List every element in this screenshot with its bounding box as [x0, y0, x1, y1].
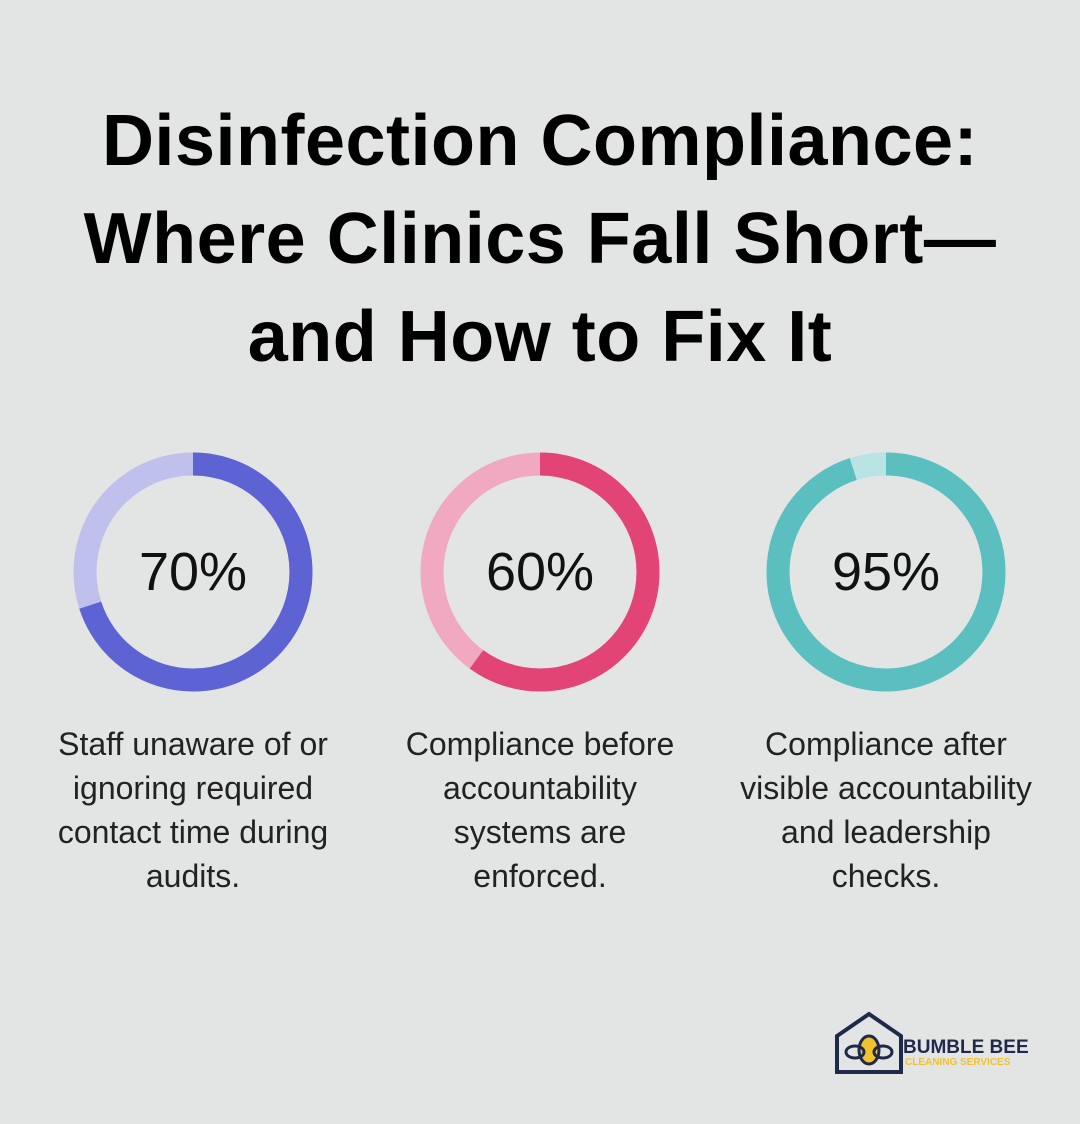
caption 3: checks. [832, 858, 940, 894]
title: Where Clinics Fall Short— [84, 199, 996, 279]
logo [835, 1012, 1029, 1074]
title: and How to Fix It [248, 297, 832, 377]
donut: 95%: 95% [832, 542, 940, 602]
donut: 60% [420, 452, 660, 692]
caption 2: enforced. [473, 858, 607, 894]
caption 2: Compliance before [406, 726, 674, 762]
caption 2: accountability [443, 770, 637, 806]
caption 2: systems are [454, 814, 626, 850]
caption 1: Staff unaware of or [58, 726, 328, 762]
caption 1: audits. [146, 858, 240, 894]
title [84, 101, 996, 377]
donut: 60%: 60% [486, 542, 594, 602]
title: Disinfection Compliance: [102, 101, 978, 181]
logo: BUMBLE BEE [903, 1037, 1029, 1058]
donut: 70% [74, 452, 312, 692]
caption 1: ignoring required [73, 770, 313, 806]
caption 3: Compliance after [765, 726, 1007, 762]
logo: CLEANING SERVICES [905, 1057, 1010, 1068]
caption 3 [740, 726, 1032, 894]
donut: 70%: 70% [139, 542, 247, 602]
caption 3: visible accountability [740, 770, 1032, 806]
caption 2 [406, 726, 674, 894]
caption 1: contact time during [58, 814, 328, 850]
caption 3: and leadership [781, 814, 991, 850]
caption 1 [58, 726, 328, 894]
donut: 95% [766, 452, 1006, 692]
